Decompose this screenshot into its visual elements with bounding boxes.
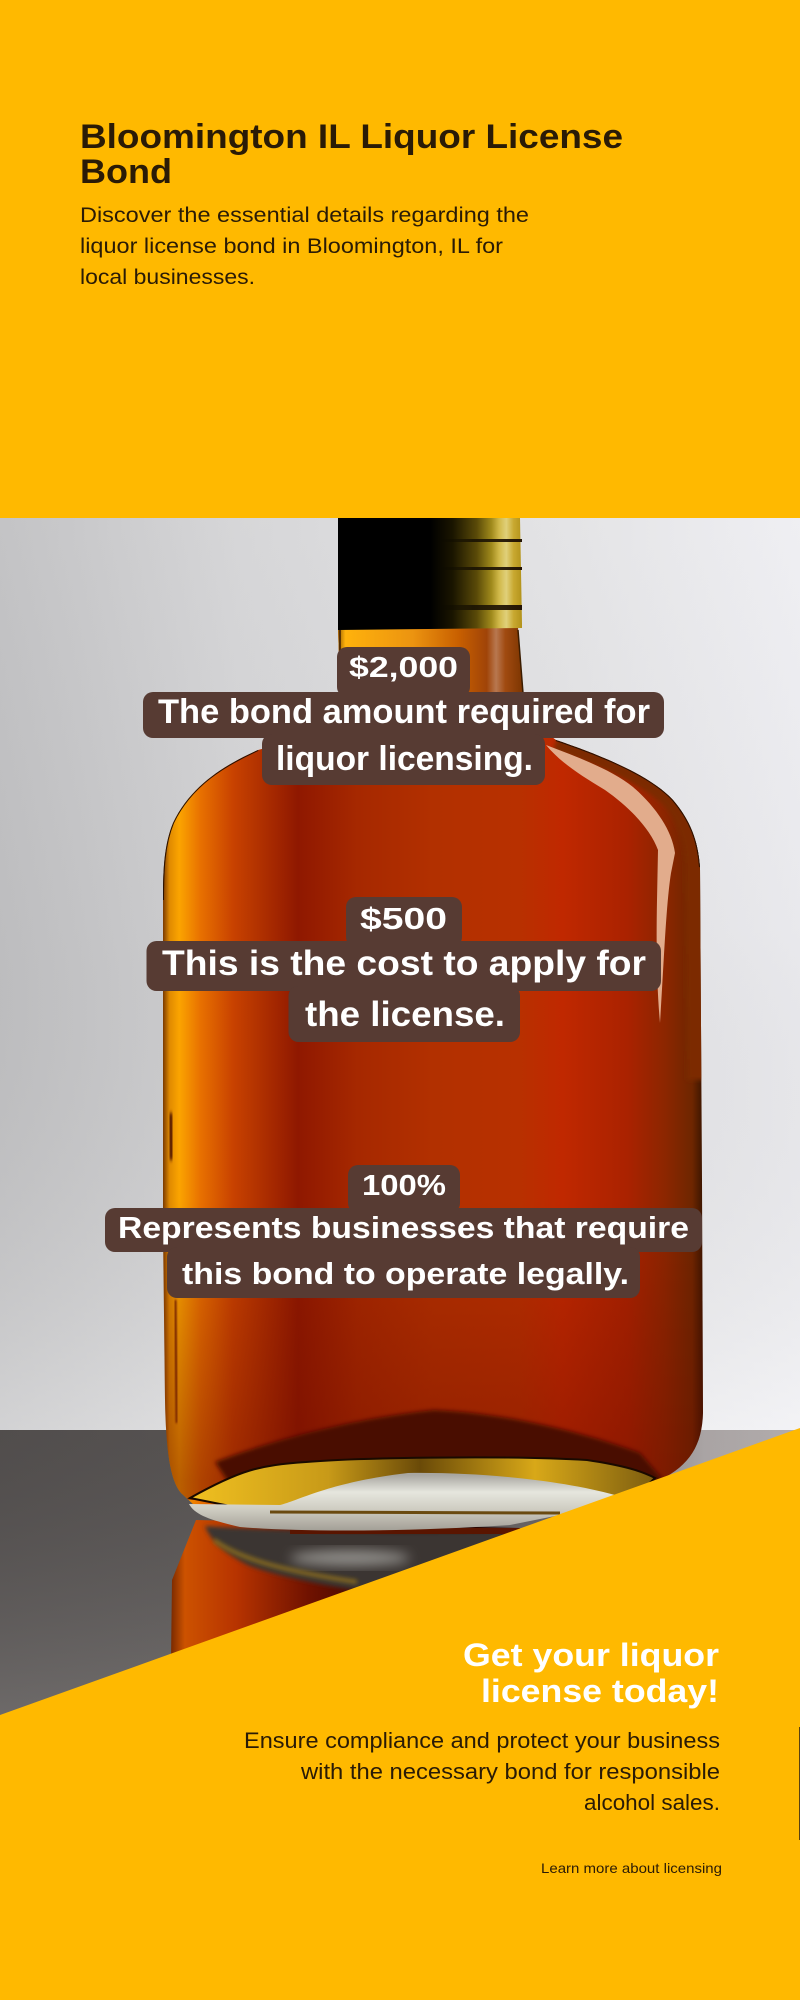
label background [143,647,664,785]
right shoulder band [556,742,696,1080]
description: this bond to operate legally. [182,1256,629,1291]
cta body text: with the necessary bond for responsible [300,1759,720,1784]
title: Bloomington IL Liquor License [80,118,623,156]
description: the license. [305,995,505,1034]
neck liquid [338,628,522,692]
bottle body with liquid [150,620,720,1520]
stat block: $2,000 [143,647,664,785]
shoulder outline [163,740,700,900]
table surface [0,1430,800,1720]
description: This is the cost to apply for [162,944,646,983]
cta body text: alcohol sales. [584,1790,720,1815]
intro text: local businesses. [80,265,255,289]
cta body text: Ensure compliance and protect your business [244,1728,720,1753]
description: Represents businesses that require [118,1210,689,1245]
intro text: Discover the essential details regarding the [80,203,529,227]
header panel [80,118,623,289]
description [158,693,650,778]
right shoulder highlight [546,745,675,1023]
label background [146,897,661,1042]
wall background [0,518,800,1433]
cta heading: Get your liquor [463,1637,719,1673]
value: 100% [362,1170,446,1202]
intro text [80,203,529,289]
description: liquor licensing. [276,740,533,778]
description: The bond amount required for [158,693,650,731]
bottle cap with rings [338,518,522,630]
description [118,1210,689,1291]
bottle glass base [189,1457,655,1531]
stat block: $500 [146,897,661,1042]
bottle reflection [171,1520,520,1660]
cta heading: license today! [481,1673,719,1709]
photo: liquor bottle on table [0,518,800,1720]
value: $2,000 [349,652,458,684]
bottom dark liquid shadow [214,1408,663,1480]
cta body text [244,1728,720,1815]
title: Bond [80,153,172,191]
lower left edge streak [175,1300,177,1423]
title [80,118,623,191]
cta heading [463,1637,719,1709]
value: $500 [360,901,447,936]
link text: Learn more about licensing [541,1860,722,1876]
diagonal call-to-action panel [0,1428,800,2000]
description [162,944,646,1034]
panel background [0,1428,800,2000]
bottle neck outline [340,630,523,693]
intro text: liquor license bond in Bloomington, IL for [80,234,503,258]
label background [105,1165,702,1298]
left edge flecks [170,1113,172,1160]
stat block: 100% [105,1165,702,1298]
